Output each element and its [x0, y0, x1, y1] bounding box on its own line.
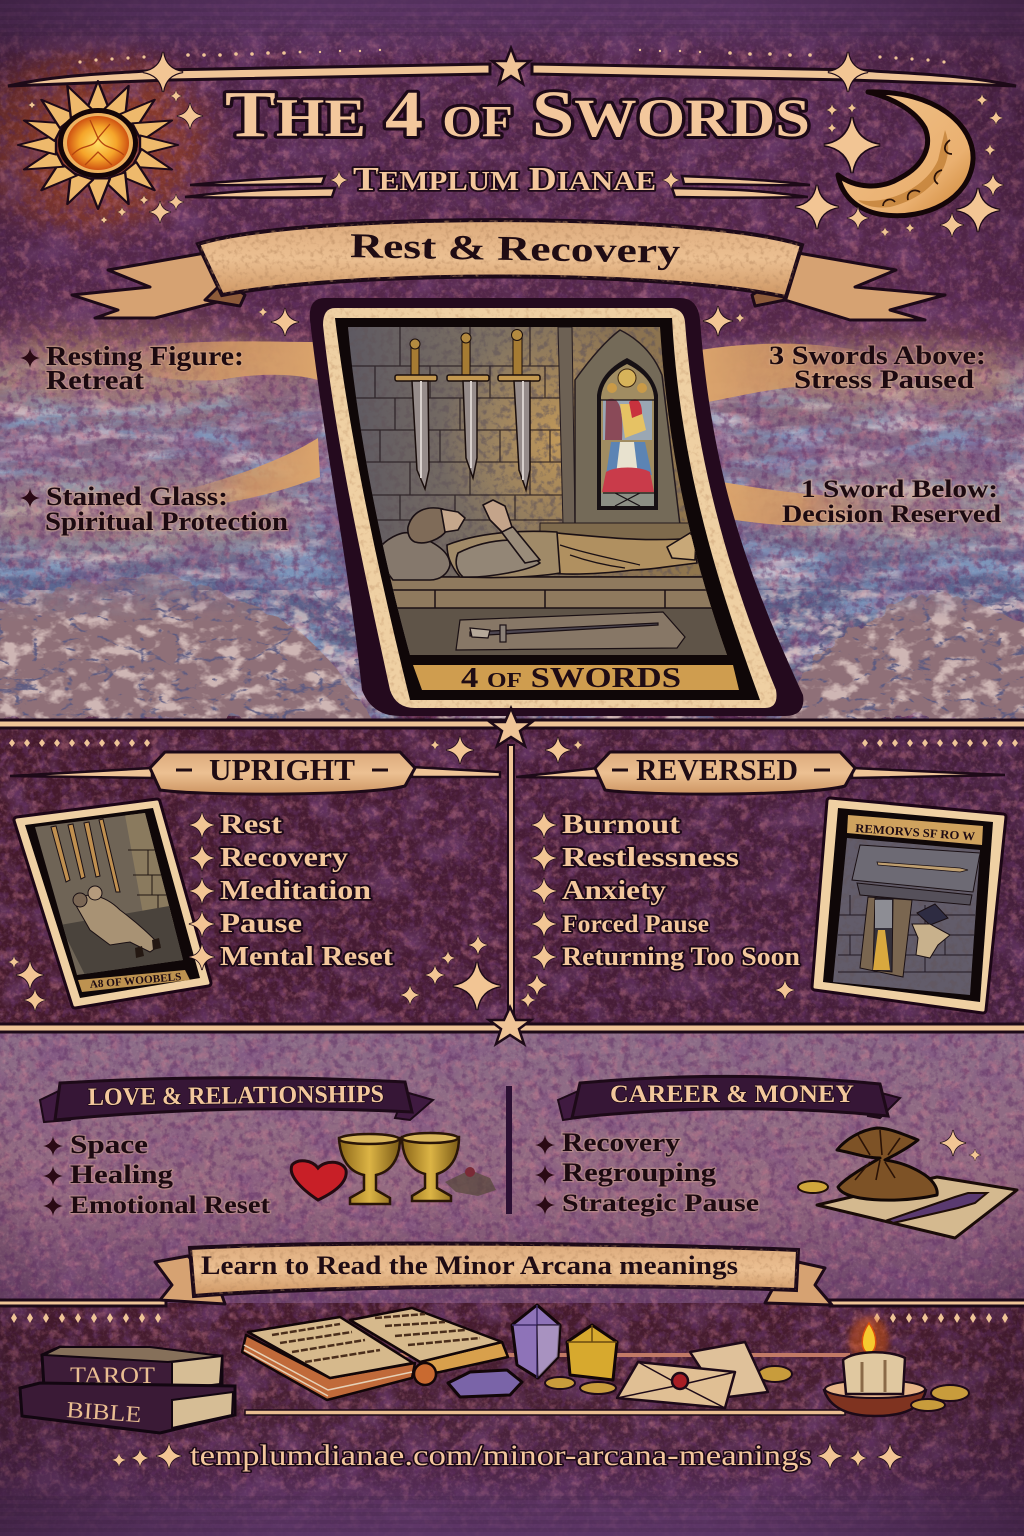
- callout: 1 Sword Below: 1 Sword Below:: [801, 476, 998, 503]
- callout: Stained Glass: Stained Glass:: [46, 482, 228, 511]
- list: career: Regrouping: [562, 1158, 716, 1187]
- icon: coin bag, letter and pen: [798, 1128, 1017, 1238]
- list: career: Strategic Pause: [562, 1190, 759, 1217]
- icon: sparkles: [940, 1130, 981, 1161]
- small upright card: A8 OF WOOBELS: [89, 971, 182, 991]
- peach wisps beside the card: [120, 341, 880, 526]
- subtitle: Templum Dianae: [185, 161, 810, 198]
- sparkles around moon: [795, 94, 1004, 237]
- icon: crystals and gem: [448, 1305, 617, 1397]
- icon: crescent moon: [838, 92, 973, 216]
- icon: coin bag: [837, 1128, 937, 1200]
- icon: Bible book: [20, 1383, 235, 1433]
- sparkles beside card top: [258, 306, 745, 336]
- icon: gem: [448, 1370, 522, 1397]
- list: upright keywords: Pause: [220, 908, 302, 938]
- subtitle: Templum Dianae: TEMPLUM DIANAE: [353, 161, 656, 198]
- stone ledge behind figure: [540, 522, 694, 544]
- icon: heart and goblets: [291, 1133, 496, 1204]
- sword 3: [498, 330, 540, 490]
- callout: Stained Glass: [20, 482, 289, 536]
- icon: Tarot book: TAROT: [70, 1363, 155, 1388]
- section divider with star: [0, 708, 1024, 1015]
- list: career: [535, 1128, 759, 1217]
- list: reversed keywords: Anxiety: [562, 875, 667, 905]
- banner: Rest & Recovery: Rest & Recovery: [350, 226, 681, 271]
- title: THE 4 OF SWORDS: [225, 78, 810, 151]
- icon: rose sprig: [445, 1167, 496, 1196]
- callout: 1 Sword Below: Decision Reserved: [782, 501, 1001, 528]
- banner: Learn to Read: Learn to Read the Minor Arcana meanings: [201, 1250, 738, 1280]
- list: upright keywords: Mental Reset: [220, 941, 393, 971]
- icon: coins: [545, 1366, 792, 1394]
- heading: Upright: [10, 752, 500, 794]
- bottom section rule: [0, 1300, 1024, 1323]
- book block left: [242, 1335, 415, 1400]
- list: love: Healing: [70, 1160, 173, 1189]
- callout: 3 Swords Above: [769, 341, 986, 394]
- callout: Resting Figure: [20, 341, 244, 395]
- slab and lower stone: [390, 576, 727, 655]
- left page: [248, 1317, 413, 1378]
- stained glass window: [575, 330, 680, 525]
- book block right: [420, 1342, 508, 1375]
- url line with stars: [112, 1439, 903, 1472]
- banner tails: [72, 253, 945, 320]
- callout: Resting Figure: Retreat: [46, 365, 144, 395]
- shelf lines: [245, 1353, 850, 1415]
- callout: 1 Sword Below: [782, 476, 1001, 528]
- url line with stars: templumdianae.com/minor-arcana-meanings: [190, 1439, 812, 1472]
- heading: Reversed: [516, 752, 1005, 794]
- icon: pen: [888, 1193, 987, 1223]
- list: love: Emotional Reset: [70, 1192, 271, 1219]
- sword 1: [395, 339, 437, 489]
- callout: Resting Figure: Resting Figure:: [46, 341, 244, 371]
- resting figure: [380, 500, 697, 580]
- top ornament rule with stars: [8, 48, 1016, 92]
- sparkles around sun: [28, 90, 203, 224]
- icon: letter: [817, 1177, 1017, 1238]
- icon: sun: [18, 81, 178, 209]
- icon: goblet left: [339, 1134, 400, 1204]
- list: love: Space: [70, 1130, 148, 1159]
- clouds on the horizon: [0, 540, 1024, 720]
- icon: goblet right: [402, 1133, 459, 1201]
- list: upright keywords: Recovery: [220, 842, 349, 872]
- icon: open book: [242, 1308, 508, 1400]
- list: love: [43, 1130, 271, 1219]
- icon: yellow crystal: [567, 1325, 617, 1380]
- heading: Love & Relationships: [40, 1078, 433, 1122]
- callout: 3 Swords Above: 3 Swords Above:: [769, 341, 986, 370]
- list: reversed keywords: Returning Too Soon: [562, 942, 801, 971]
- heading: Upright: UPRIGHT: [209, 752, 355, 787]
- heading: Career & Money: [558, 1076, 900, 1120]
- callout: Stained Glass: Spiritual Protection: [45, 507, 289, 536]
- callout: 3 Swords Above: Stress Paused: [794, 365, 975, 394]
- right page: [350, 1308, 502, 1362]
- section divider 2 with star: [0, 1007, 1024, 1044]
- sword below on slab: [456, 612, 685, 650]
- three swords on the wall: [395, 330, 540, 490]
- small reversed card: REMORVS SF RO W: [855, 821, 975, 843]
- list: reversed keywords: [531, 809, 801, 971]
- card title band: 4 OF SWORDS: [461, 662, 681, 694]
- card scene: [340, 320, 735, 660]
- small reversed card: [815, 801, 1003, 1010]
- list: reversed keywords: Forced Pause: [562, 911, 709, 938]
- list: reversed keywords: Burnout: [562, 809, 680, 839]
- banner: Learn to Read: [155, 1244, 832, 1305]
- mid section sparkles: [8, 736, 795, 1011]
- heading: Reversed: REVERSED: [636, 752, 798, 787]
- icon: heart: [291, 1161, 346, 1200]
- wall column: [558, 327, 575, 525]
- icon: purple crystal: [512, 1305, 560, 1378]
- list: upright keywords: Meditation: [220, 875, 371, 905]
- vertical divider: [506, 1086, 512, 1214]
- icon: Tarot book: [42, 1347, 222, 1392]
- diamond dot rows: [9, 739, 1018, 747]
- icon: sealed envelope: [617, 1342, 768, 1408]
- icon: coin: [798, 1181, 828, 1193]
- main tarot card: 4 of Swords: [310, 298, 803, 716]
- list: career: Recovery: [562, 1128, 680, 1157]
- banner: Rest & Recovery: [72, 220, 945, 320]
- list: upright keywords: Rest: [220, 809, 282, 839]
- heading: Love & Relationships: LOVE & RELATIONSHIPS: [88, 1081, 384, 1111]
- list: reversed keywords: Restlessness: [562, 842, 739, 872]
- small upright card: [17, 802, 208, 1005]
- sword 2: [447, 333, 489, 478]
- list: upright keywords: [189, 809, 393, 971]
- icon: candle: [824, 1316, 969, 1416]
- card title band: [413, 662, 739, 694]
- icon: Bible book: BIBLE: [66, 1397, 142, 1427]
- heading: Career & Money: CAREER & MONEY: [610, 1081, 854, 1108]
